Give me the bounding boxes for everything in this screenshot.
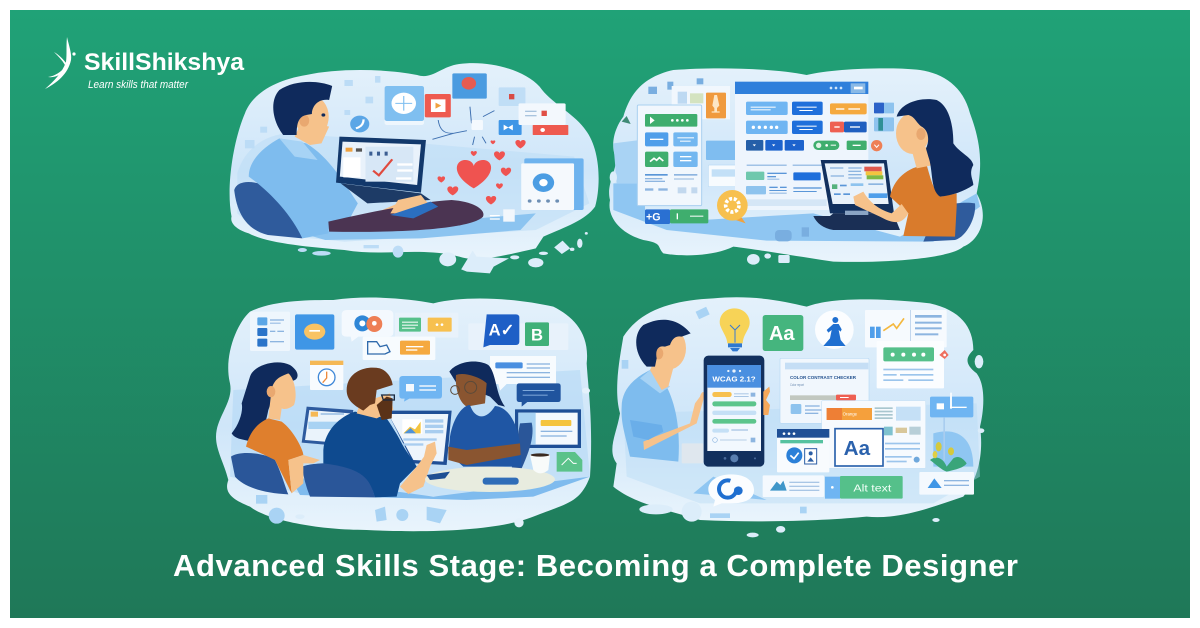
chart card — [865, 310, 947, 347]
man — [249, 82, 428, 238]
illustration backdrop — [216, 298, 591, 531]
panel: team collaboration around a table — [216, 298, 591, 531]
illustration backdrop — [612, 297, 983, 521]
panel: accessibility and WCAG — [612, 297, 984, 537]
image caption card — [763, 475, 824, 497]
phone: WCAG checklist: WCAG 2.1? — [712, 376, 756, 383]
desk — [328, 200, 483, 232]
logo tagline: Learn skills that matter — [88, 79, 189, 91]
illustration backdrop — [230, 63, 599, 259]
woman — [853, 99, 973, 237]
coffee cup and green card — [530, 452, 582, 473]
splashes — [439, 232, 588, 273]
chair — [234, 182, 302, 238]
UI kit card with large Aa — [822, 401, 926, 468]
small browser card — [777, 429, 829, 472]
chair — [923, 203, 975, 242]
icon: plant — [930, 442, 967, 472]
orange alert card — [706, 93, 726, 118]
left wireframe panel — [637, 86, 730, 206]
icon: accessibility figure — [815, 310, 854, 349]
illustration backdrop — [609, 68, 983, 262]
icon: Aa green tile — [763, 315, 803, 351]
UI kit card with large Aa: Aa — [844, 437, 871, 460]
color contrast checker card — [780, 358, 869, 423]
man with phone — [622, 320, 704, 463]
logo wordmark: SkillShikshya — [84, 49, 245, 76]
bottom chips — [645, 209, 708, 224]
logo: SkillShikshya — [45, 37, 245, 91]
floating UI icons — [350, 73, 584, 222]
chat bubble icon — [708, 474, 754, 507]
icon: leaping figure swoosh — [45, 37, 76, 89]
color contrast checker card: COLOR CONTRAST CHECKER — [790, 375, 857, 380]
chairs — [231, 423, 533, 497]
round table — [425, 467, 555, 492]
UI kit card with large Aa: Orange — [843, 412, 858, 417]
image placeholder card — [919, 472, 974, 495]
laptop — [813, 160, 900, 230]
floating chat and UI cards: B — [531, 325, 543, 344]
icon: light bulb — [720, 308, 750, 351]
icon: settings speech bubble — [717, 190, 748, 223]
blue notification card — [930, 393, 973, 461]
main component library window — [735, 82, 894, 210]
icon: Aa green tile: Aa — [769, 323, 795, 345]
person: man with beard from behind — [323, 368, 437, 497]
floating chat and UI cards — [250, 310, 568, 407]
alt text tag — [825, 476, 903, 499]
person: woman with orange shirt — [232, 362, 320, 493]
phone: WCAG checklist — [704, 356, 770, 467]
bottom chips: +G — [646, 212, 661, 224]
person: woman with glasses — [448, 362, 522, 467]
laptop — [336, 137, 431, 203]
title: Advanced Skills Stage: Becoming a Complete Designer — [173, 548, 1018, 583]
alt text tag: Alt text — [853, 483, 891, 494]
card with green rating bar — [877, 341, 949, 388]
panel: designer with laptop, emotional design — [230, 63, 599, 273]
panel: designer building a design system — [609, 68, 983, 265]
tablets and screens — [302, 407, 581, 465]
floating chat and UI cards: A✓ — [489, 320, 515, 339]
hearts — [438, 140, 526, 204]
color contrast checker card: Color report — [790, 383, 804, 387]
